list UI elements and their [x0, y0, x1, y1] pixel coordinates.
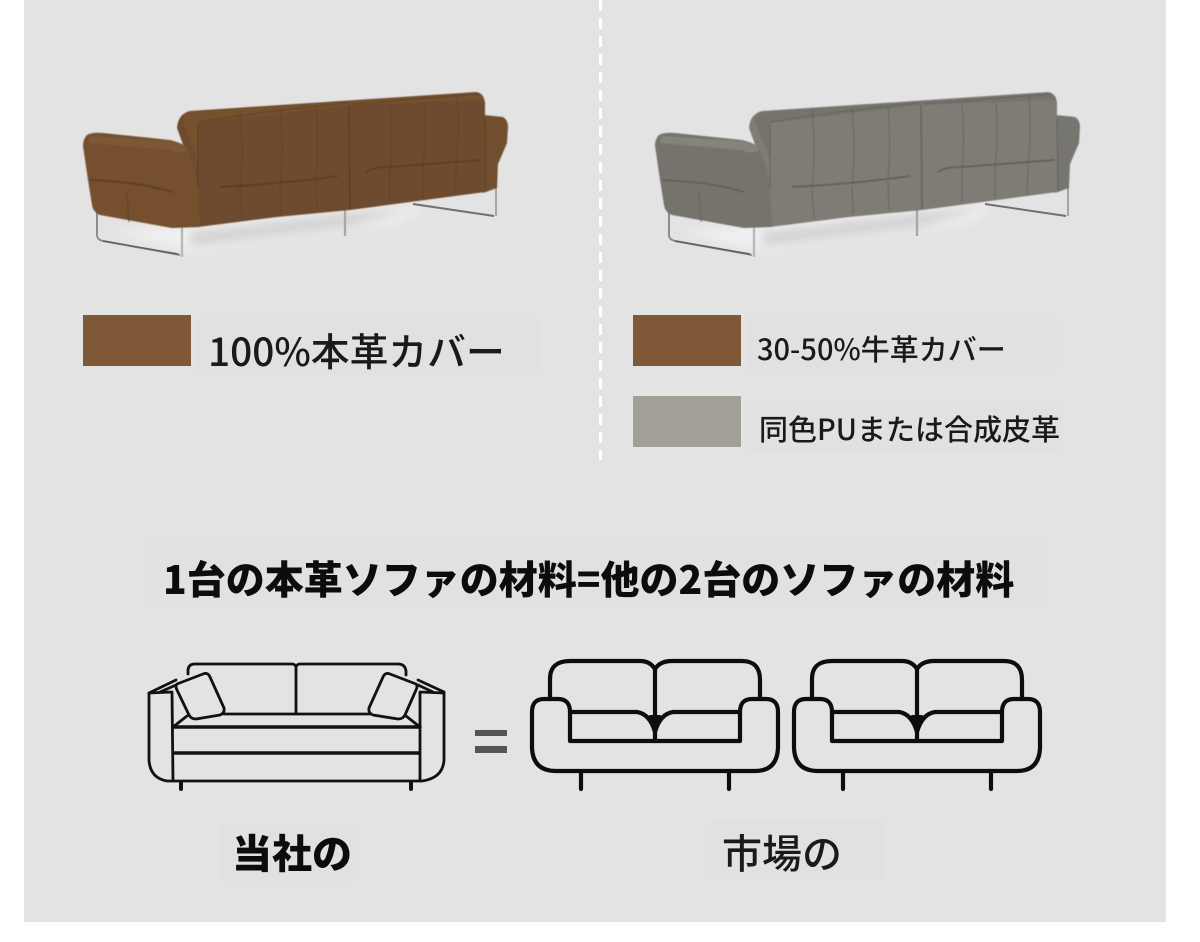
icon: market sofa 1 — [532, 661, 778, 789]
caption: market: 市場の — [722, 822, 842, 880]
caption: ours: 当社の — [232, 822, 352, 880]
legend swatch: leather right — [633, 315, 741, 366]
legend label background left — [197, 319, 540, 374]
legend swatch: PU grey — [633, 396, 741, 447]
heading background — [150, 538, 1042, 608]
center dashed divider — [599, 0, 602, 460]
caption background: market — [711, 821, 885, 879]
caption background: ours — [220, 825, 358, 881]
equals sign — [475, 730, 507, 753]
legend label background right — [748, 318, 1057, 370]
legend label: 100% leather: 100%本革カバー — [208, 322, 505, 378]
legend label background PU — [750, 400, 1062, 452]
legend label: 30-50% leather: 30-50%牛革カバー — [757, 327, 1006, 369]
legend label: PU or synthetic: 同色PUまたは合成皮革 — [759, 407, 1060, 449]
heading: 1台の本革ソファの材料=他の2台のソファの材料 — [163, 550, 1014, 606]
sofa photo: brown leather — [83, 92, 508, 257]
legend swatch: leather left — [83, 315, 191, 366]
sofa photo: grey covered — [655, 92, 1080, 257]
icon: market sofa 2 — [794, 661, 1040, 789]
icon: our large sofa — [149, 664, 444, 789]
